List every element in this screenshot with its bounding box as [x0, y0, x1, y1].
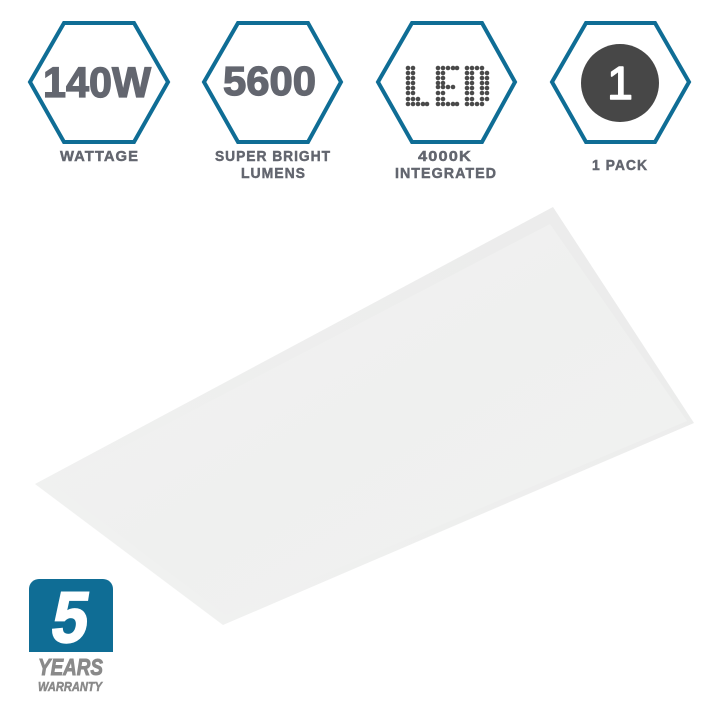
badge: LED integrated [378, 23, 515, 182]
badge: LED integrated: 4000K [418, 149, 472, 165]
icon: LED dot matrix [406, 66, 489, 106]
badge: 1 pack: 1 PACK [592, 158, 648, 174]
badge: 5600 lumens: SUPER BRIGHT [215, 149, 331, 165]
warranty badge [29, 577, 113, 694]
warranty badge: YEARS [38, 654, 104, 680]
icon: number circle: 1 [607, 57, 633, 109]
badge: 140W wattage [30, 23, 168, 165]
panel: LED ceiling panel [35, 207, 694, 625]
badge: 5600 lumens: 5600 [223, 58, 316, 104]
icon: number circle [581, 44, 659, 122]
badge: 5600 lumens: LUMENS [241, 166, 306, 182]
badge: 140W wattage: WATTAGE [60, 149, 139, 165]
badge: 1 pack [552, 23, 689, 174]
warranty badge: WARRANTY [38, 679, 103, 694]
warranty badge: 5 [46, 577, 95, 658]
badge: 140W wattage: 140W [43, 59, 151, 107]
badge: LED integrated: INTEGRATED [395, 166, 497, 182]
badge: 5600 lumens [204, 23, 341, 182]
